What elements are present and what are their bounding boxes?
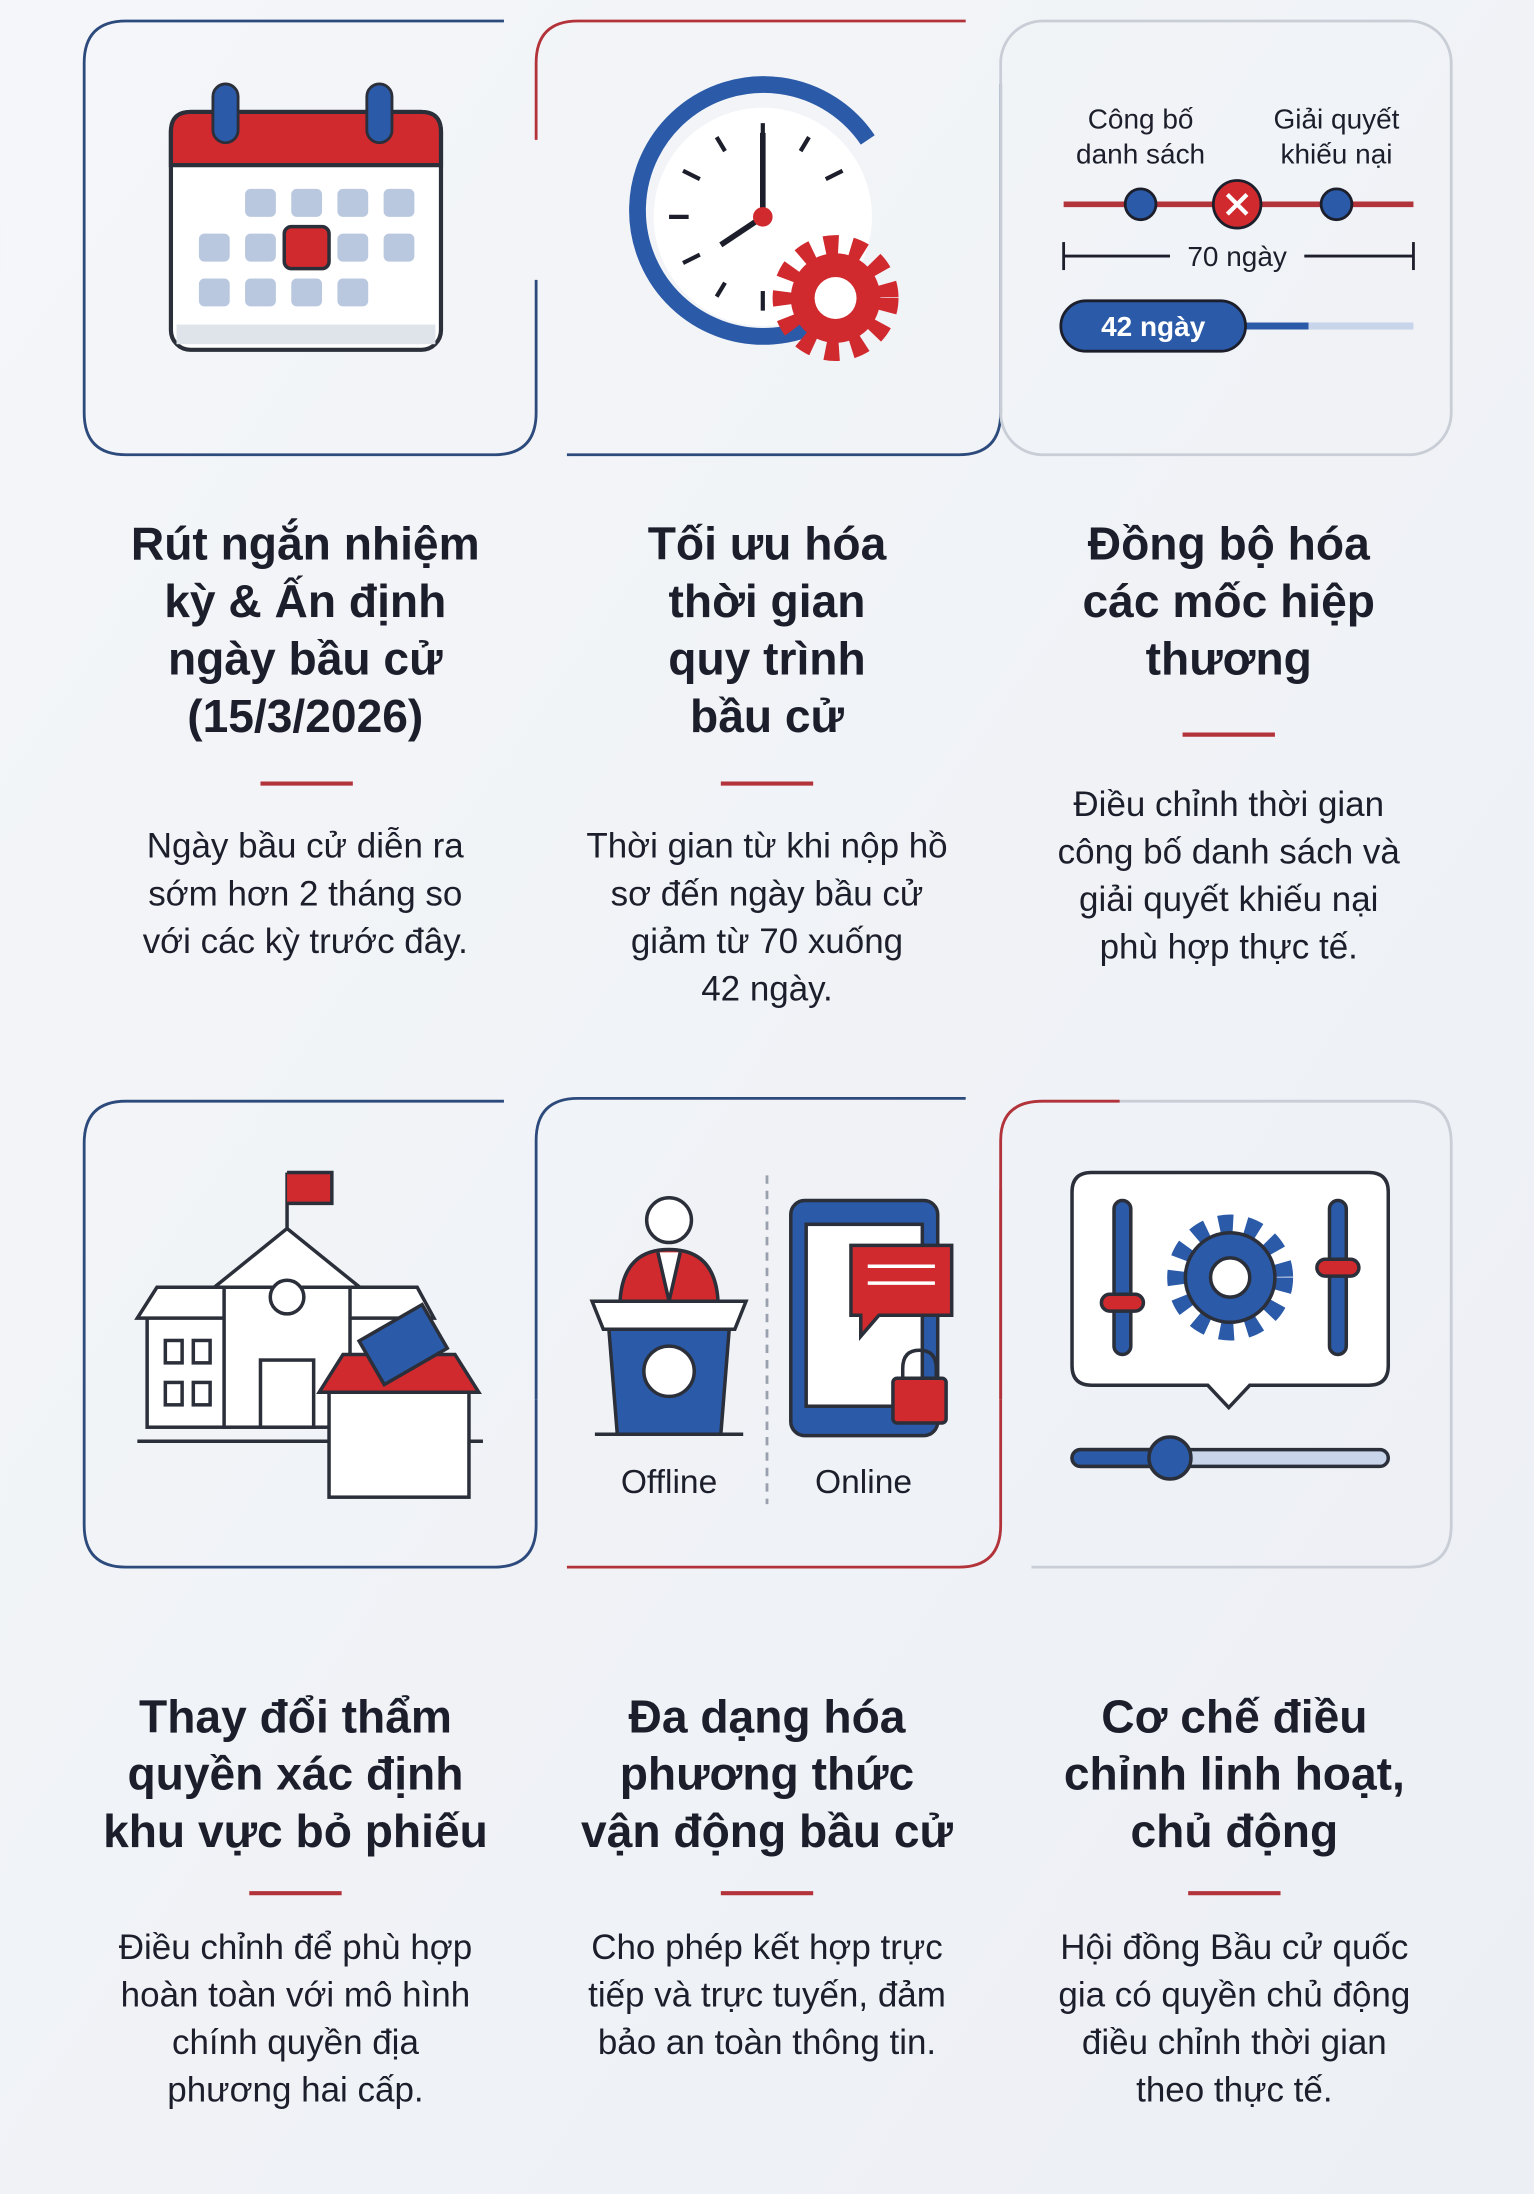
text: col1 row2: Điều chỉnh để phù hợp	[119, 1928, 472, 1967]
timeline labels: danh sách	[1076, 139, 1205, 170]
timeline labels	[1076, 104, 1400, 170]
heading: col1 row1	[131, 518, 480, 742]
heading: col3 row2: chỉnh linh hoạt,	[1064, 1748, 1405, 1800]
heading: col3 row2: chủ động	[1131, 1805, 1338, 1857]
heading: col3 row1: Đồng bộ hóa	[1088, 518, 1370, 570]
panel: offline online	[536, 1098, 1001, 1567]
text: col3 row2: điều chỉnh thời gian	[1082, 2023, 1387, 2062]
timeline labels: Công bố	[1088, 104, 1193, 135]
text: col3 row1: giải quyết khiếu nại	[1079, 880, 1378, 919]
text: col2 row2: tiếp và trực tuyến, đảm	[588, 1976, 946, 2015]
icon: settings window	[1072, 1173, 1388, 1479]
heading: col3 row2	[1064, 1690, 1405, 1857]
heading: col2 row1: quy trình	[668, 632, 866, 684]
panel: polling station	[84, 1101, 536, 1567]
icon: tablet with lock	[791, 1201, 952, 1436]
text: col3 row2: Hội đồng Bầu cử quốc	[1060, 1928, 1408, 1967]
text: col2 row1: Thời gian từ khi nộp hồ	[586, 827, 948, 866]
text: col2 row2	[588, 1928, 946, 2062]
panel: timeline	[1001, 21, 1451, 455]
timeline labels: Giải quyết	[1274, 104, 1400, 135]
heading: col1 row1: (15/3/2026)	[187, 690, 423, 742]
text: col2 row1	[586, 827, 948, 1008]
heading: col2 row2: Đa dạng hóa	[629, 1690, 906, 1742]
text: col1 row2: hoàn toàn với mô hình	[121, 1976, 470, 2015]
heading: col2 row1: bầu cử	[690, 690, 845, 742]
text: col3 row1	[1058, 785, 1400, 966]
text: col2 row1: sơ đến ngày bầu cử	[611, 874, 923, 913]
text: col2 row2: bảo an toàn thông tin.	[598, 2023, 936, 2062]
text: col1 row1: với các kỳ trước đây.	[143, 922, 468, 961]
heading: col2 row1: Tối ưu hóa	[648, 518, 887, 570]
text: col1 row2: chính quyền địa	[172, 2023, 419, 2062]
text: col1 row1	[143, 827, 468, 961]
panel: offline online: Offline	[621, 1464, 717, 1501]
text: col3 row2: theo thực tế.	[1136, 2071, 1333, 2110]
heading: col3 row1	[1083, 518, 1375, 684]
heading: col1 row1: kỳ & Ấn định	[164, 575, 446, 627]
text: col2 row2: Cho phép kết hợp trực	[591, 1928, 943, 1967]
timeline labels: khiếu nại	[1281, 139, 1392, 170]
heading: col1 row2: quyền xác định	[127, 1748, 463, 1800]
heading: col1 row2	[103, 1690, 488, 1857]
text: col1 row1: sớm hơn 2 tháng so	[148, 874, 462, 913]
text: col1 row2: phương hai cấp.	[167, 2071, 424, 2110]
heading: col1 row2: khu vực bỏ phiếu	[103, 1805, 488, 1857]
panel: clock	[536, 21, 1001, 455]
timeline bar: 42 ngày	[1101, 311, 1206, 342]
text: col3 row1: công bố danh sách và	[1058, 832, 1400, 871]
panel: calendar	[84, 21, 536, 455]
heading: col1 row2: Thay đổi thẩm	[139, 1690, 452, 1742]
text: col3 row1: phù hợp thực tế.	[1100, 927, 1358, 966]
heading: col2 row2	[581, 1690, 954, 1857]
text: col2 row1: giảm từ 70 xuống	[631, 922, 903, 961]
heading: col2 row2: phương thức	[620, 1748, 914, 1800]
text: col1 row1: Ngày bầu cử diễn ra	[147, 827, 464, 866]
icon: calendar	[171, 84, 441, 350]
heading: col3 row2: Cơ chế điều	[1101, 1690, 1367, 1742]
icon: clock with gear	[637, 85, 889, 351]
text: col3 row2	[1058, 1928, 1410, 2110]
timeline bar: 70 ngày	[1187, 241, 1287, 272]
text: col3 row2: gia có quyền chủ động	[1058, 1976, 1410, 2015]
heading: col1 row1: Rút ngắn nhiệm	[131, 518, 480, 570]
heading: col3 row1: các mốc hiệp	[1083, 575, 1375, 627]
text: col3 row1: Điều chỉnh thời gian	[1073, 785, 1384, 824]
heading: col2 row1: thời gian	[669, 575, 865, 627]
text: col2 row1: 42 ngày.	[701, 969, 833, 1008]
heading: col3 row1: thương	[1146, 632, 1312, 684]
icon: school and ballot box	[137, 1173, 483, 1497]
timeline bar	[1061, 181, 1413, 351]
icon: podium speaker	[592, 1198, 746, 1434]
heading: col2 row1	[648, 518, 887, 742]
heading: col1 row1: ngày bầu cử	[168, 632, 443, 684]
text: col1 row2	[119, 1928, 472, 2110]
heading: col2 row2: vận động bầu cử	[581, 1805, 954, 1857]
panel: settings	[1001, 1101, 1451, 1567]
panel: offline online: Online	[815, 1464, 912, 1501]
